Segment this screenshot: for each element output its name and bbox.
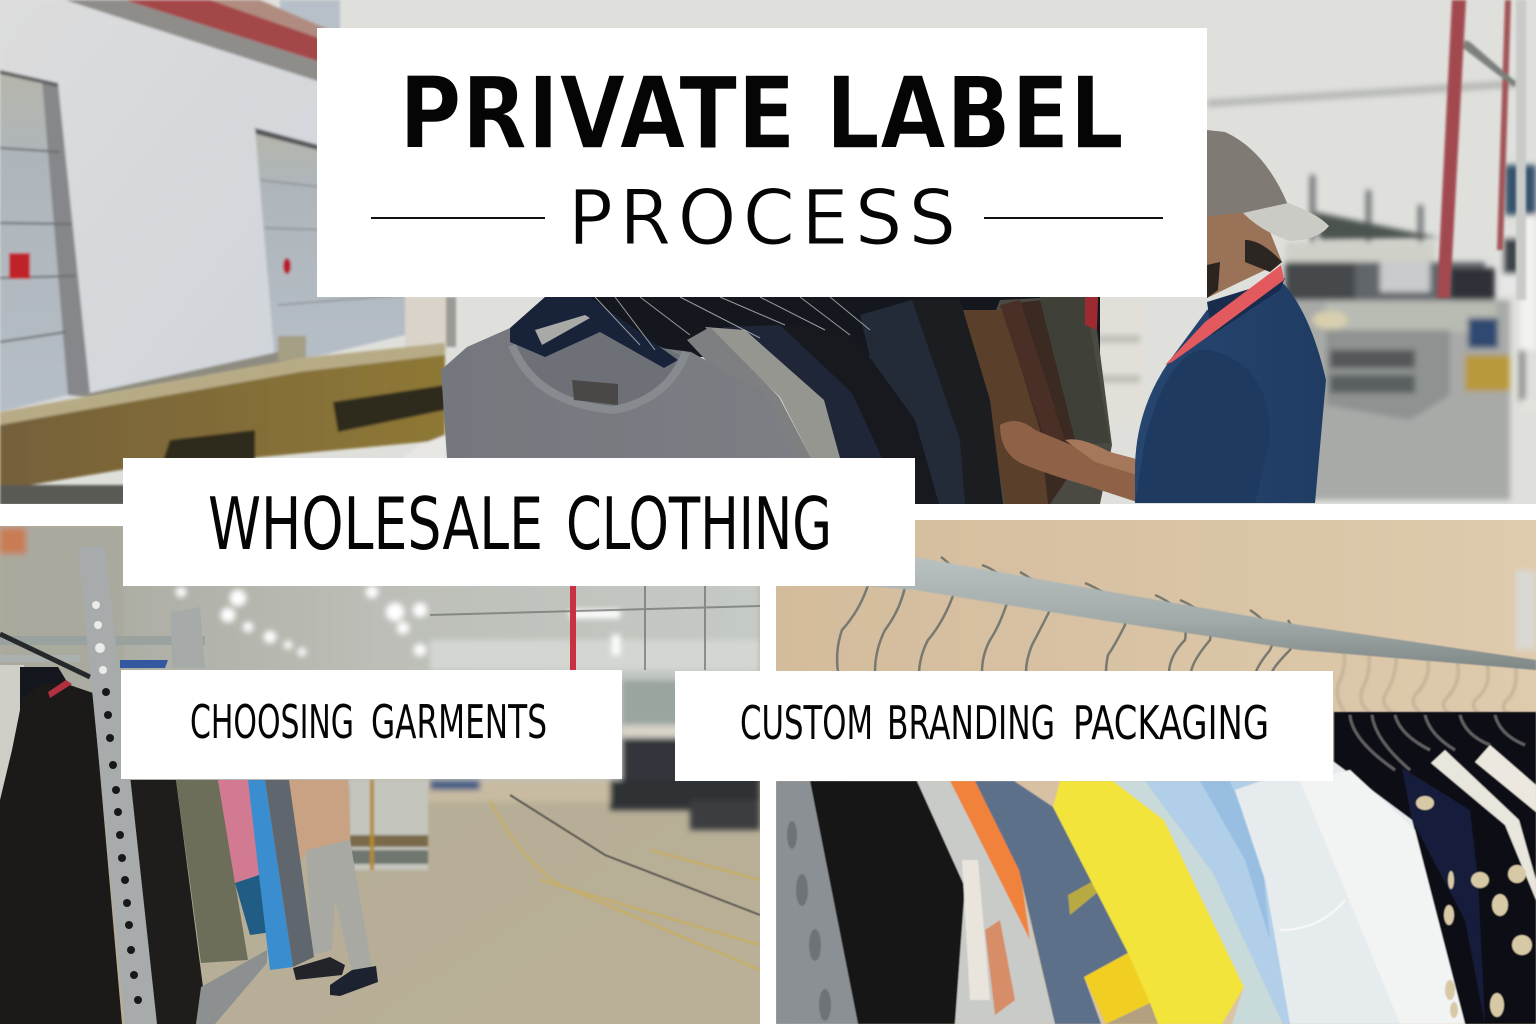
label: wholesale clothing: WHOLESALE <box>208 482 543 566</box>
shirts on rail <box>776 712 1536 1024</box>
rule: left of process <box>371 217 545 219</box>
photo: warehouse aisle with rack <box>0 526 760 1024</box>
label: custom branding packaging: BRANDING <box>887 696 1055 750</box>
label: choosing garments: CHOOSING <box>190 695 354 749</box>
ceiling beams <box>430 586 760 670</box>
label: custom branding packaging: PACKAGING <box>1073 696 1269 750</box>
heading: private label: PRIVATE LABEL <box>399 55 1124 172</box>
panel: main title <box>317 28 1207 297</box>
panel: wholesale clothing <box>123 458 915 586</box>
label: custom branding packaging: CUSTOM <box>740 696 873 750</box>
label: wholesale clothing: CLOTHING <box>566 482 832 566</box>
red steel posts <box>1437 0 1526 300</box>
rack second upright <box>171 607 205 668</box>
ceiling, lights and back wall <box>0 526 760 830</box>
label: custom branding packaging <box>740 696 1269 750</box>
background factory: fence, canopy, crowd, tables, floor <box>1095 80 1536 500</box>
photo: rail with hangers and colourful shirts <box>776 520 1536 1024</box>
worker <box>1000 130 1329 503</box>
glass cart behind shopper <box>350 780 428 870</box>
floor markings <box>490 800 760 970</box>
shopper <box>288 780 378 996</box>
building wall with doors <box>0 0 456 412</box>
rule: right of process <box>984 217 1163 219</box>
rack clothing <box>0 634 314 1024</box>
subheading: process: PROCESS <box>568 173 956 262</box>
blurred hangers right <box>1335 654 1518 712</box>
perforated steel upright <box>78 545 157 1024</box>
hangers <box>837 557 1294 672</box>
clothes rail <box>840 557 1536 670</box>
photo: warehouse worker browsing racks <box>0 0 1536 505</box>
panel: choosing garments <box>121 670 622 779</box>
hanging garments <box>441 297 1112 504</box>
loading dock ledge and ground <box>0 343 445 505</box>
label: choosing garments: GARMENTS <box>371 695 547 749</box>
panel: custom branding packaging <box>675 671 1333 781</box>
